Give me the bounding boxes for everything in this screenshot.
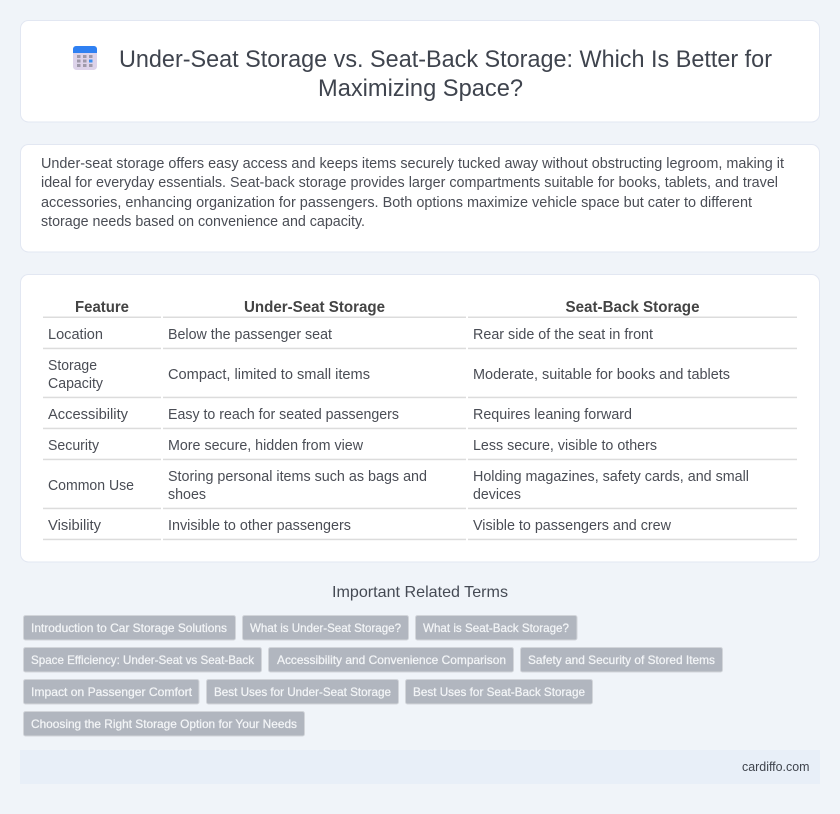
heading: important related terms: Important Related Terms (332, 584, 508, 601)
table header row (43, 299, 797, 318)
table header row: Seat-Back Storage (566, 299, 700, 316)
row: security: Less secure, visible to others (473, 438, 657, 454)
related term tags: Safety and Security of Stored Items (528, 653, 715, 667)
table header row: Feature (75, 299, 129, 316)
panel: introduction text (20, 144, 820, 252)
footer bar: cardiffo.com (742, 759, 810, 774)
panel: comparison table (20, 274, 820, 562)
row: accessibility (43, 407, 797, 429)
row: common use: devices (473, 487, 521, 503)
related term tags (24, 616, 722, 736)
related term tags: Introduction to Car Storage Solutions (31, 621, 227, 635)
panel: introduction text: storage needs based on convenience and capacity. (41, 214, 365, 230)
related term tags: Accessibility and Convenience Comparison (277, 653, 506, 667)
row: location: Location (48, 327, 103, 343)
row: visibility: Visibility (48, 518, 102, 534)
panel: introduction text: Under-seat storage offers easy access and keeps items securely tucked away without obstructing legroom, making it (41, 156, 784, 172)
row: security: Security (48, 438, 100, 454)
related term tags: Space Efficiency: Under-Seat vs Seat-Back (31, 653, 255, 667)
row: storage capacity: Moderate, suitable for books and tablets (473, 367, 730, 383)
related term tags: Impact on Passenger Comfort (31, 685, 193, 699)
row: location (43, 327, 797, 349)
row: security (43, 438, 797, 460)
row: common use: Common Use (48, 478, 134, 494)
title: Under-Seat Storage vs. Seat-Back Storage: Which Is Better for (119, 46, 772, 73)
table header row: Under-Seat Storage (244, 299, 385, 316)
row: storage capacity: Capacity (48, 376, 104, 392)
related term tags: What is Seat-Back Storage? (423, 621, 569, 635)
row: common use (43, 469, 797, 509)
icon: calendar (73, 46, 97, 70)
row: security: More secure, hidden from view (168, 438, 364, 454)
panel: introduction text: ideal for everyday essentials. Seat-back storage provides larger compartments suitable for books, tablets, and travel (41, 175, 778, 191)
row: visibility: Visible to passengers and crew (473, 518, 672, 534)
related term tags: Best Uses for Seat-Back Storage (413, 685, 585, 699)
related term tags: What is Under-Seat Storage? (250, 621, 401, 635)
row: visibility (43, 518, 797, 540)
title: Maximizing Space? (318, 75, 523, 102)
row: accessibility: Requires leaning forward (473, 407, 632, 423)
row: storage capacity: Storage (48, 358, 97, 374)
panel: title header (20, 20, 820, 122)
row: storage capacity: Compact, limited to small items (168, 367, 370, 383)
row: accessibility: Easy to reach for seated passengers (168, 407, 399, 423)
footer bar (20, 750, 820, 784)
panel: introduction text: accessories, enhancing organization for passengers. Both options maximize vehicle space but cater to different (41, 195, 752, 211)
title (119, 46, 772, 102)
row: accessibility: Accessibility (48, 407, 129, 423)
row: location: Rear side of the seat in front (473, 327, 653, 343)
related term tags: Choosing the Right Storage Option for Your Needs (31, 717, 297, 731)
row: storage capacity (43, 358, 797, 398)
row: common use: Holding magazines, safety cards, and small (473, 469, 749, 485)
row: visibility: Invisible to other passengers (168, 518, 351, 534)
row: location: Below the passenger seat (168, 327, 332, 343)
row: common use: Storing personal items such as bags and (168, 469, 427, 485)
related term tags: Best Uses for Under-Seat Storage (214, 685, 391, 699)
row: common use: shoes (168, 487, 206, 503)
